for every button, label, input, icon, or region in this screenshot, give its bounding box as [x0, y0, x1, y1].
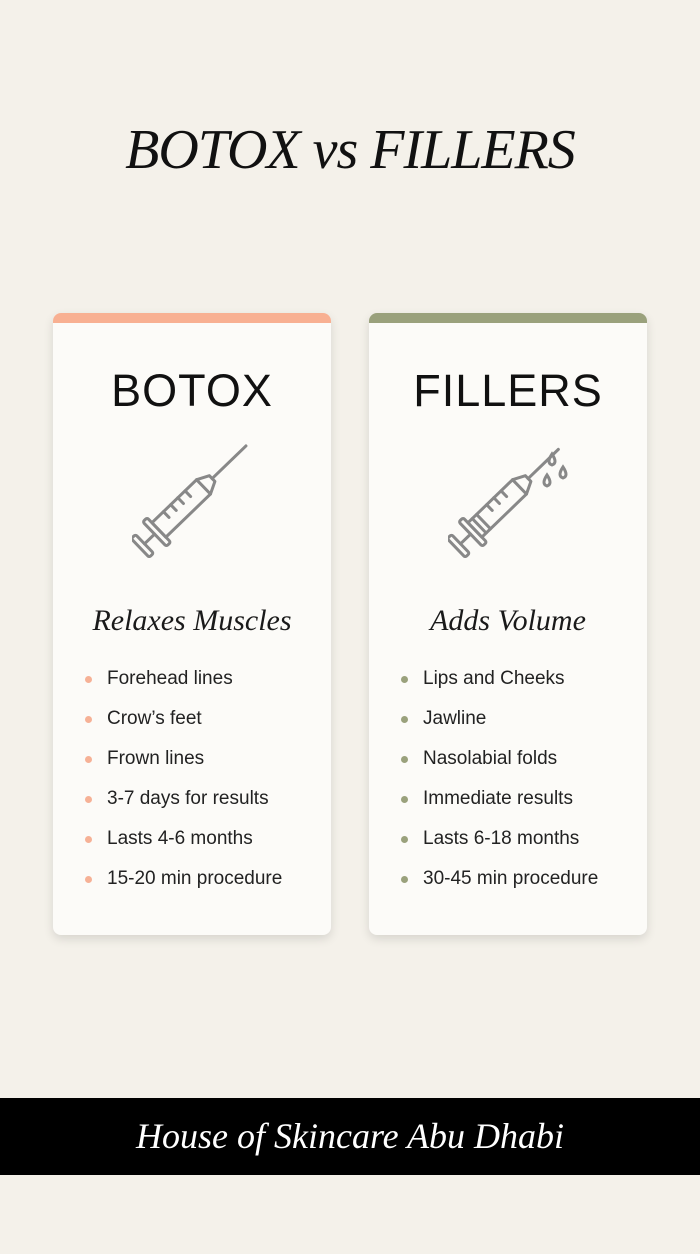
- heading: fillers: FILLERS: [413, 365, 603, 416]
- footer banner: [0, 1098, 700, 1175]
- list: fillers: Lasts 6-18 months: [423, 828, 579, 849]
- list: fillers: Nasolabial folds: [423, 748, 557, 769]
- subheading: Adds Volume: [430, 604, 586, 637]
- list: botox: 15-20 min procedure: [107, 868, 282, 889]
- panel: fillers: [369, 313, 647, 935]
- icon: syringe: [132, 444, 248, 558]
- footer banner: House of Skincare Abu Dhabi: [136, 1116, 564, 1156]
- list: fillers: Jawline: [423, 708, 486, 729]
- panel: botox: [53, 313, 331, 935]
- list: fillers: [401, 668, 598, 889]
- subheading: Relaxes Muscles: [92, 604, 292, 637]
- list: botox: Forehead lines: [107, 668, 233, 689]
- list: botox: Frown lines: [107, 748, 204, 769]
- list: botox: Lasts 4-6 months: [107, 828, 253, 849]
- list: fillers: Immediate results: [423, 788, 573, 809]
- list: botox: Crow’s feet: [107, 708, 202, 729]
- title: BOTOX vs FILLERS: [125, 119, 575, 181]
- icon: syringe with drops: [448, 448, 568, 558]
- heading: botox: BOTOX: [111, 365, 273, 416]
- list: fillers: 30-45 min procedure: [423, 868, 598, 889]
- list: botox: [85, 668, 282, 889]
- list: botox: 3-7 days for results: [107, 788, 269, 809]
- list: fillers: Lips and Cheeks: [423, 668, 565, 689]
